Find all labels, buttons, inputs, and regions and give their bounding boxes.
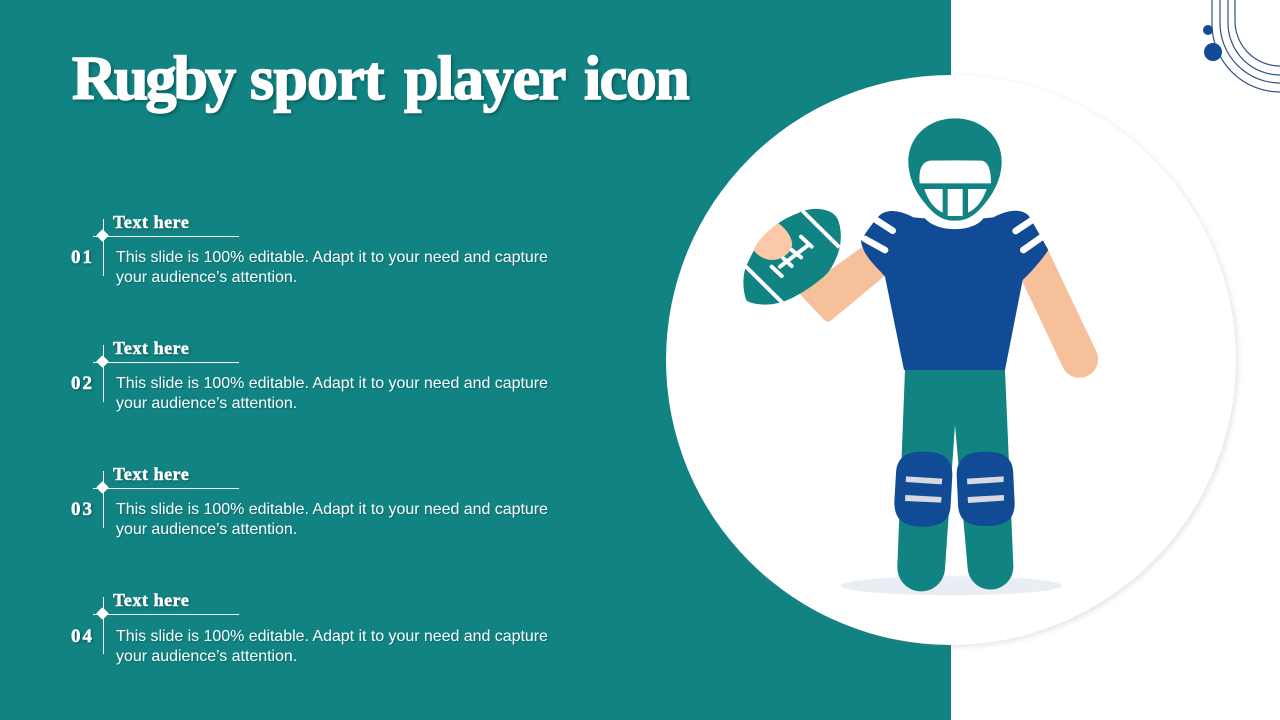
- right knee pad: [957, 452, 1015, 526]
- panel: teal background band: [0, 0, 951, 720]
- heading 01: Text here: [113, 212, 189, 232]
- number 04: 04: [71, 626, 94, 647]
- text block 03: [116, 500, 548, 538]
- heading 04: Text here: [113, 590, 189, 610]
- text block 02: your audience’s attention.: [116, 394, 297, 412]
- number 03: 03: [71, 499, 94, 520]
- ball: [743, 209, 841, 305]
- left arm: [798, 247, 885, 322]
- title: sport: [250, 45, 384, 113]
- number 01: 01: [71, 247, 94, 268]
- list item 04: [71, 590, 548, 666]
- panel: white circle: [666, 75, 1236, 645]
- right arm: [1022, 251, 1098, 378]
- text block 03: This slide is 100% editable. Adapt it to your need and capture: [116, 500, 548, 518]
- text block 04: This slide is 100% editable. Adapt it to your need and capture: [116, 628, 548, 644]
- text block 04: [116, 628, 548, 666]
- icon: rugby player: [743, 118, 1098, 595]
- list item 01: [71, 212, 548, 286]
- list item 02: [71, 338, 548, 412]
- text block 01: [116, 248, 548, 286]
- decoration: corner arcs and dots: [1203, 0, 1280, 92]
- title: [72, 45, 692, 116]
- text block 03: your audience’s attention.: [116, 520, 297, 538]
- text block 02: This slide is 100% editable. Adapt it to your need and capture: [116, 374, 548, 392]
- player legs: [894, 370, 1015, 591]
- jersey: [861, 211, 1048, 370]
- heading 02: Text here: [113, 338, 189, 358]
- number 02: 02: [71, 373, 94, 394]
- shoulder stripes: [865, 220, 1043, 250]
- heading 03: Text here: [113, 464, 189, 484]
- text block 01: This slide is 100% editable. Adapt it to your need and capture: [116, 248, 548, 266]
- left knee pad: [894, 452, 952, 527]
- helmet: [908, 118, 1002, 221]
- text block 02: [116, 374, 548, 412]
- text block 04: your audience’s attention.: [116, 648, 297, 664]
- title: player: [404, 45, 565, 113]
- title: Rugby: [72, 45, 233, 113]
- text block 01: your audience’s attention.: [116, 268, 297, 286]
- ground shadow: [841, 576, 1062, 595]
- list item 03: [71, 464, 548, 538]
- title: icon: [584, 45, 688, 113]
